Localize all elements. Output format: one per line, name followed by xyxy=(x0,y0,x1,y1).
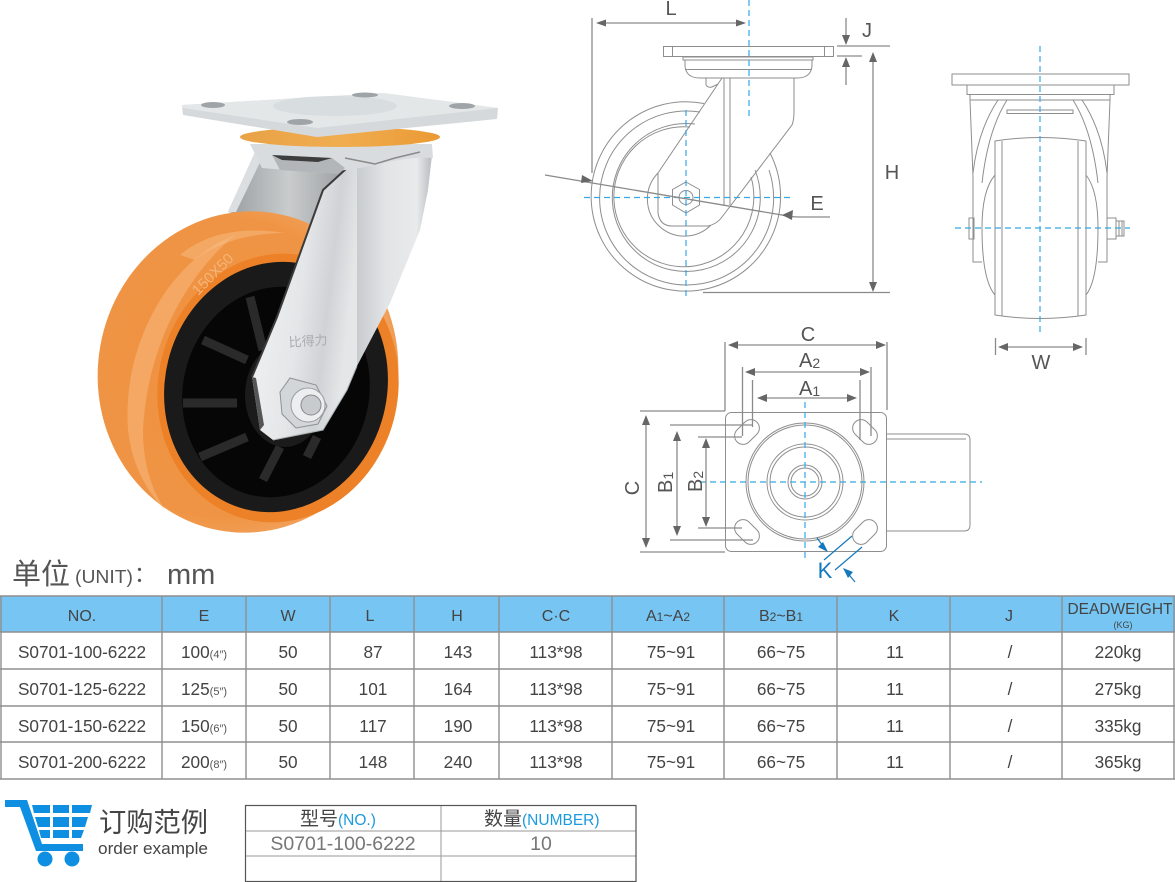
brand stamp: 比得力 xyxy=(288,332,328,350)
table header row xyxy=(0,596,1175,632)
dimension C horizontal: C xyxy=(801,324,815,346)
dimension J xyxy=(837,18,890,85)
row S0701-100-6222: 100(4″) xyxy=(181,642,227,662)
order table header xyxy=(300,808,600,830)
row S0701-150-6222 xyxy=(18,716,1141,736)
dimension A1: 1 xyxy=(812,383,820,399)
row S0701-200-6222: 50 xyxy=(278,752,298,772)
row S0701-200-6222 xyxy=(18,752,1141,772)
centre lines xyxy=(584,0,790,298)
unit heading: (UNIT) xyxy=(75,567,133,587)
row S0701-100-6222: 75~91 xyxy=(647,642,695,662)
row S0701-125-6222: 101 xyxy=(359,679,387,699)
row S0701-125-6222: 50 xyxy=(278,679,298,699)
axle bolt and nut xyxy=(280,378,327,428)
table header row: H xyxy=(451,608,463,625)
row S0701-150-6222: 150(6″) xyxy=(181,716,227,736)
top bearing collar xyxy=(250,144,433,174)
dimension A1 xyxy=(752,378,860,440)
unit heading: 单位 xyxy=(12,558,70,591)
order example table xyxy=(245,805,636,882)
row S0701-150-6222: 66~75 xyxy=(757,716,805,736)
mounting top plate xyxy=(182,92,498,137)
row S0701-125-6222: S0701-125-6222 xyxy=(18,679,146,699)
dimension B1: B xyxy=(655,480,677,493)
row S0701-100-6222: 11 xyxy=(886,642,904,662)
order table values: 10 xyxy=(530,833,552,855)
slotted mounting holes xyxy=(731,416,881,548)
unit heading xyxy=(12,558,215,591)
wheel hub spokes xyxy=(183,297,317,480)
row S0701-150-6222: 335kg xyxy=(1095,716,1141,736)
table header row: E xyxy=(199,608,209,625)
order table header: 数量(NUMBER) xyxy=(484,808,600,830)
top plate xyxy=(952,74,1129,114)
row S0701-125-6222: 113*98 xyxy=(529,679,583,699)
dimension A2: 2 xyxy=(812,355,820,371)
mounting plate xyxy=(726,412,886,552)
row S0701-100-6222: 113*98 xyxy=(529,642,583,662)
order example heading xyxy=(98,808,208,858)
row S0701-100-6222: 87 xyxy=(363,642,383,662)
top view technical drawing xyxy=(622,324,982,583)
row S0701-125-6222: 66~75 xyxy=(757,679,805,699)
wheel outline circles xyxy=(591,102,781,291)
dimension A2 xyxy=(742,350,871,436)
table header row: K xyxy=(889,608,900,625)
dimension B1 xyxy=(655,425,753,540)
row S0701-200-6222: 365kg xyxy=(1095,752,1141,772)
row S0701-125-6222: / xyxy=(1008,679,1013,699)
front fork plate xyxy=(252,155,432,440)
centre lines xyxy=(700,402,982,558)
order example heading: 订购范例 xyxy=(99,808,208,838)
row S0701-100-6222: 50 xyxy=(278,642,298,662)
wheel projection xyxy=(887,434,970,531)
row S0701-150-6222: S0701-150-6222 xyxy=(18,716,146,736)
orange seal ring xyxy=(240,127,440,147)
wheel tread xyxy=(982,138,1098,318)
dimension W: W xyxy=(1032,352,1051,374)
dimension K xyxy=(817,536,862,583)
table header row: DEADWEIGHT xyxy=(1068,601,1173,618)
table header row: B2~B1 xyxy=(759,608,803,625)
table header row: A1~A2 xyxy=(646,608,690,625)
row S0701-150-6222: / xyxy=(1008,716,1013,736)
wheel size marking: 150X50 xyxy=(189,250,237,299)
side view technical drawing xyxy=(545,0,899,298)
row S0701-100-6222: 66~75 xyxy=(757,642,805,662)
row S0701-200-6222: 240 xyxy=(444,752,472,772)
table header row: C·C xyxy=(542,608,570,625)
row S0701-100-6222: 220kg xyxy=(1095,642,1141,662)
order table header: 型号(NO.) xyxy=(300,808,376,830)
order table values: S0701-100-6222 xyxy=(270,833,416,855)
order example heading: order example xyxy=(98,839,208,858)
top plate outline xyxy=(664,46,834,87)
row S0701-150-6222: 75~91 xyxy=(647,716,695,736)
dimension W xyxy=(996,338,1086,374)
order table values xyxy=(270,833,552,855)
dimension B1: 1 xyxy=(660,472,676,480)
dimension B2 xyxy=(685,437,742,528)
fork legs xyxy=(970,100,1110,262)
dimension A1: A xyxy=(799,378,812,400)
specification table xyxy=(0,596,1175,779)
centre lines xyxy=(955,46,1130,332)
product photo: swivel caster xyxy=(72,92,498,557)
dimension H xyxy=(703,52,899,292)
row S0701-125-6222: 75~91 xyxy=(647,679,695,699)
concentric bearing circles xyxy=(746,423,864,541)
row S0701-100-6222 xyxy=(18,642,1141,662)
row S0701-200-6222: S0701-200-6222 xyxy=(18,752,146,772)
fork outline xyxy=(658,78,794,226)
row S0701-200-6222: 75~91 xyxy=(647,752,695,772)
dimension C vertical: C xyxy=(622,481,644,495)
table header row: L xyxy=(366,608,375,625)
dimension B2: 2 xyxy=(690,471,706,479)
axle bolt ends xyxy=(969,218,1124,239)
row S0701-125-6222: 164 xyxy=(444,679,473,699)
row S0701-150-6222: 113*98 xyxy=(529,716,583,736)
dimension C vertical xyxy=(622,411,725,552)
dimension L xyxy=(592,0,746,173)
row S0701-200-6222: 113*98 xyxy=(529,752,583,772)
dimension H: H xyxy=(885,162,899,184)
unit heading: mm xyxy=(167,559,215,591)
row S0701-200-6222: 200(8″) xyxy=(181,752,227,772)
row S0701-200-6222: 11 xyxy=(886,752,904,772)
dimension E xyxy=(545,175,830,220)
row S0701-150-6222: 11 xyxy=(886,716,904,736)
row S0701-125-6222: 275kg xyxy=(1095,679,1141,699)
dimension J: J xyxy=(862,20,872,42)
row S0701-100-6222: / xyxy=(1008,642,1013,662)
row S0701-100-6222: S0701-100-6222 xyxy=(18,642,146,662)
dimension B2: B xyxy=(685,479,707,492)
rear fork leg xyxy=(228,148,350,228)
row S0701-200-6222: / xyxy=(1008,752,1013,772)
row S0701-200-6222: 148 xyxy=(359,752,387,772)
table header row: (KG) xyxy=(1114,620,1133,630)
table header row: J xyxy=(1005,608,1013,625)
row S0701-100-6222: 143 xyxy=(444,642,472,662)
row S0701-200-6222: 66~75 xyxy=(757,752,805,772)
axle hex nut xyxy=(672,182,700,213)
dimension A2: A xyxy=(799,350,812,372)
row S0701-125-6222: 125(5″) xyxy=(181,679,227,699)
unit heading: ： xyxy=(134,562,156,587)
table header row: NO. xyxy=(68,608,96,625)
front view technical drawing xyxy=(952,46,1130,374)
table grid xyxy=(0,596,1175,779)
row S0701-125-6222: 11 xyxy=(886,679,904,699)
row S0701-150-6222: 190 xyxy=(444,716,472,736)
orange polyurethane wheel xyxy=(72,187,424,557)
dimension C horizontal xyxy=(725,324,887,411)
row S0701-150-6222: 50 xyxy=(278,716,298,736)
row S0701-150-6222: 117 xyxy=(359,716,387,736)
dimension E: E xyxy=(810,193,824,215)
dimension K: K xyxy=(818,558,833,583)
icon: shopping cart xyxy=(5,800,92,866)
row S0701-125-6222 xyxy=(18,679,1141,699)
table header row: W xyxy=(280,608,296,625)
